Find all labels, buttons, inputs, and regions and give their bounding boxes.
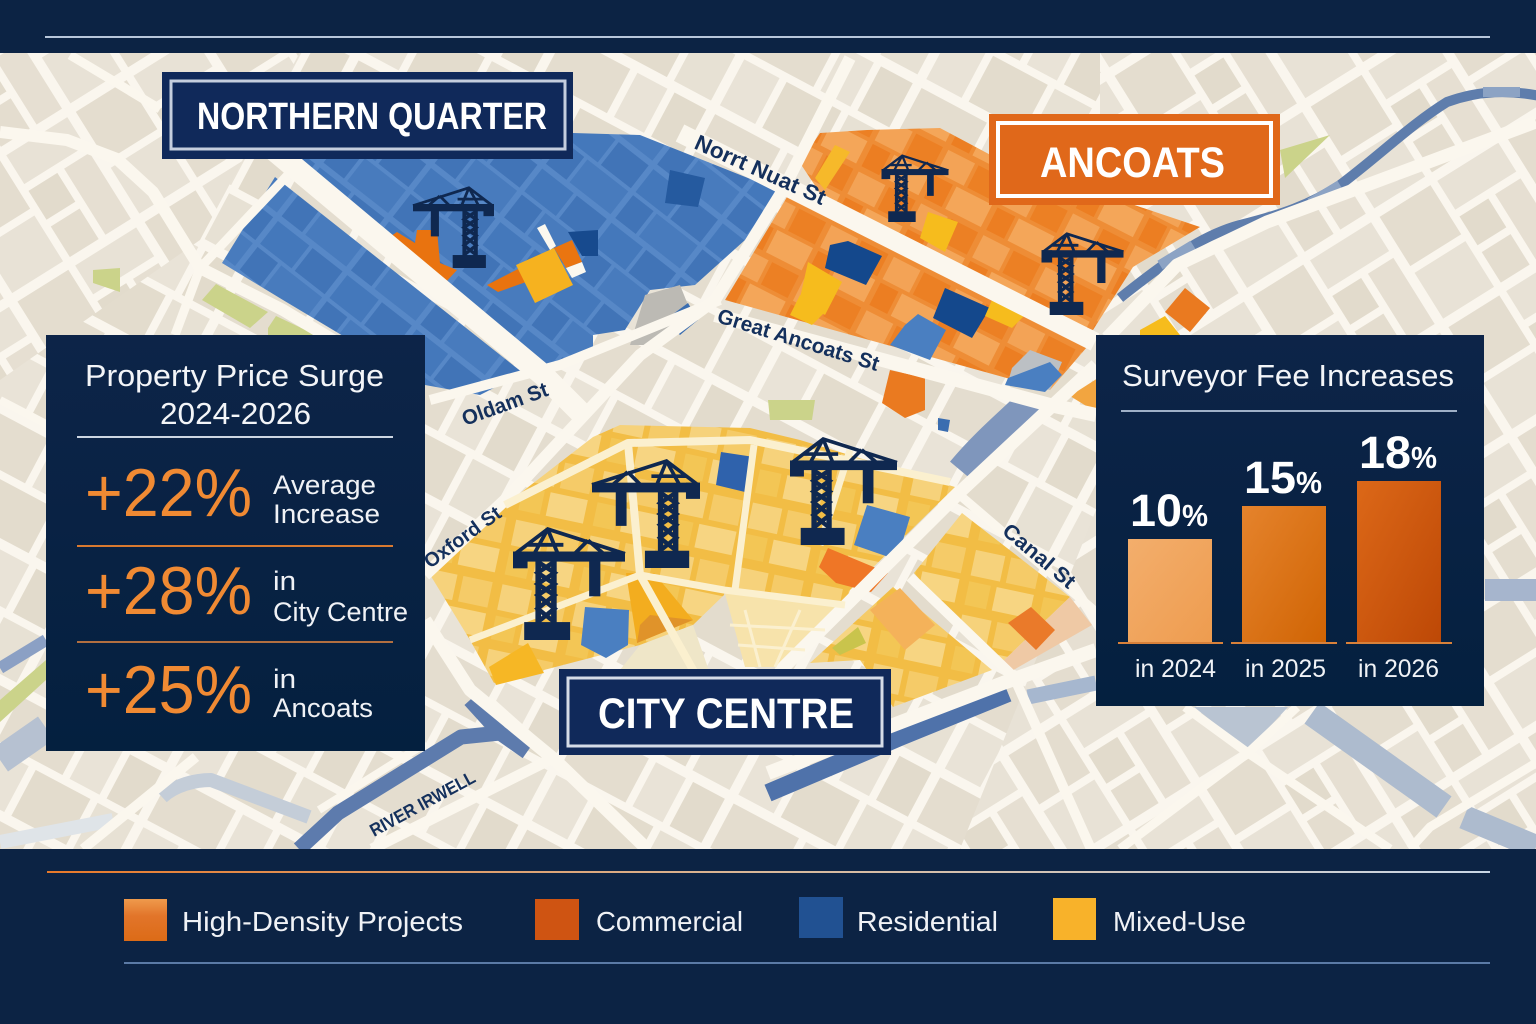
label: City Centre [559,669,891,755]
bar: 2026: % [1411,440,1437,475]
heading: property price surge: 2024-2026 [160,396,311,431]
stat: average increase: Average [273,470,376,500]
crane: Ancoats north [882,156,948,222]
crane: City Centre west [513,529,625,640]
stat: average increase: Increase [273,499,380,529]
roads [0,55,1536,849]
stat: city centre: +28% [85,553,252,629]
label: Oxford St: Oxford St [420,502,506,573]
crane: City Centre middle [592,461,700,568]
parks [0,135,1330,722]
label: Canal St: Canal St [998,519,1080,593]
label: Oldam St: Oldam St [459,378,551,431]
stat: city centre: City Centre [273,597,408,627]
crane: Northern Quarter [413,188,494,268]
label: Northern Quarter: NORTHERN QUARTER [197,96,547,138]
map blocks: upper-left district [0,52,300,380]
bar: 2026 [1346,427,1452,683]
bar: 2026: 18 [1359,427,1411,478]
stat: average increase [85,455,380,531]
zone: City Centre [432,425,1092,707]
map background [0,52,1536,849]
heading: surveyor fee increases: Surveyor Fee Increases [1122,358,1454,393]
bar: 2024: 10 [1130,485,1182,536]
zone: Northern Quarter [222,133,778,395]
bar chart [1118,427,1452,683]
bar: 2025: in 2025 [1245,655,1326,683]
legend: high-density projects: High-Density Projects [182,906,463,937]
crane: City Centre east [790,439,897,545]
crane: Ancoats east [1042,234,1124,315]
cranes [413,156,1124,640]
stat: ancoats: in [273,664,296,694]
footer legend [0,849,1536,1024]
label: City Centre: CITY CENTRE [598,690,854,738]
stat: average increase: +22% [85,455,252,531]
label: Ancoats: ANCOATS [1040,139,1225,187]
street labels [366,130,1080,841]
heading: property price surge [85,358,384,431]
legend: mixed-use: Mixed-Use [1113,906,1246,937]
bar: 2024: in 2024 [1135,655,1216,683]
legend: commercial [535,899,743,940]
stat: ancoats [85,652,373,728]
label: Northern Quarter [162,72,573,159]
header bar [0,0,1536,53]
label: River Irwell: RIVER IRWELL [366,767,479,841]
zone: Ancoats [725,128,1210,432]
bar: 2025 [1231,452,1337,683]
map blocks: right district [960,52,1536,849]
stat: city centre [85,553,408,629]
label: Ancoats [989,114,1280,205]
legend: mixed-use [1053,898,1246,940]
legend: residential [799,897,998,938]
legend: high-density projects [124,899,463,941]
label: Great Ancoats St: Great Ancoats St [715,305,882,376]
bar: 2025: 15 [1244,452,1296,503]
bar: 2024: % [1182,498,1208,533]
panel: surveyor fee increases [1096,335,1484,706]
panel: property price surge [46,335,425,751]
legend: commercial: Commercial [596,906,743,937]
bar: 2024 [1118,485,1223,683]
heading: property price surge: Property Price Surge [85,358,384,393]
bar: 2026: in 2026 [1358,655,1439,683]
stat: city centre: in [273,566,296,596]
label: Norrt Nuat St: Norrt Nuat St [691,130,831,210]
stat: ancoats: Ancoats [273,693,373,723]
river [0,92,1536,849]
bar: 2025: % [1296,465,1322,500]
legend: residential: Residential [857,906,998,937]
stat: ancoats: +25% [85,652,252,728]
